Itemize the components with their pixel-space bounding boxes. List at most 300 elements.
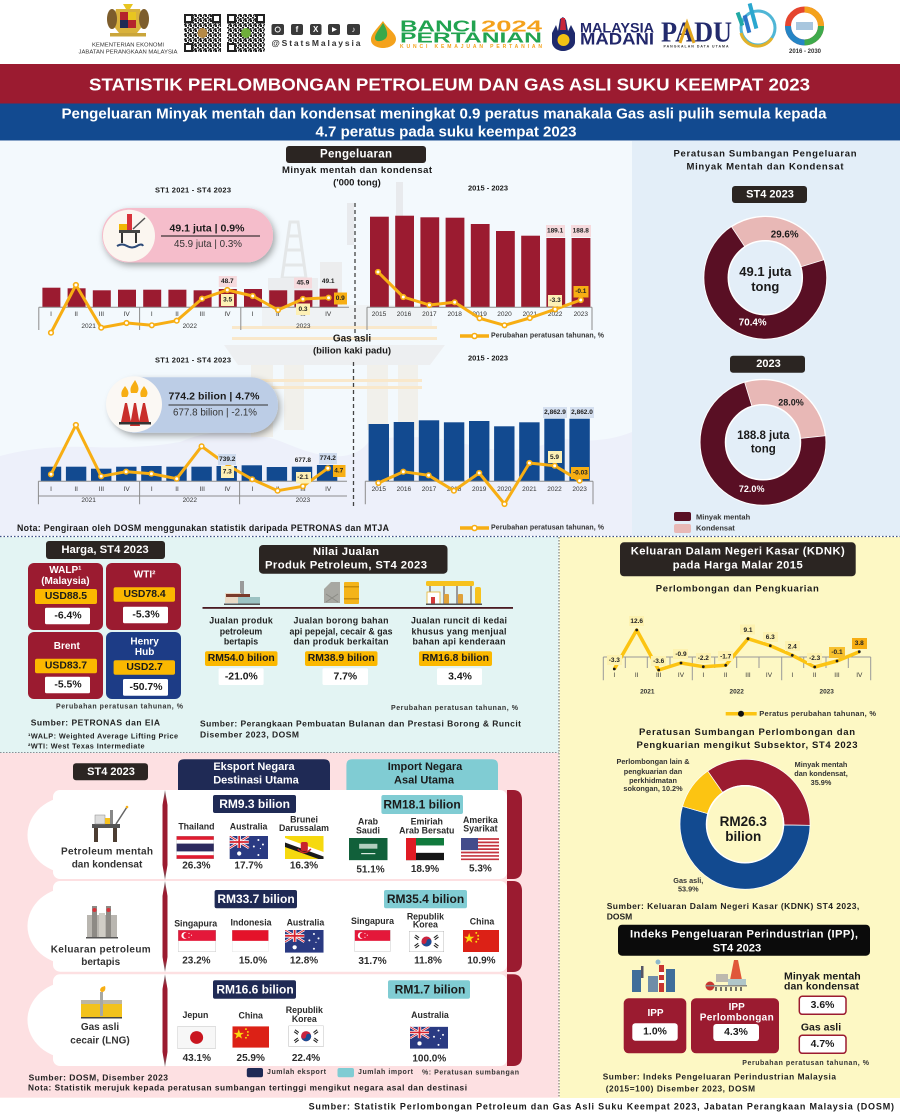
import country: China: China <box>470 917 494 927</box>
import country: China: 10.9% <box>467 956 496 966</box>
ministry name: JABATAN PERANGKAAN MALAYSIA <box>78 49 178 55</box>
line chart: GDP mining growth: III <box>745 672 751 679</box>
bar chart: gas quarterly <box>38 465 347 504</box>
export country: Brunei: Darussalam <box>279 823 329 833</box>
bar chart: gas annual: 2018 <box>447 486 462 493</box>
line chart: GDP mining growth: I <box>791 672 793 679</box>
heading: subsector share <box>636 727 858 751</box>
legend: donut: Kondensat <box>696 524 735 532</box>
icon: oil platform <box>92 806 128 842</box>
bar chart: gas quarterly: III <box>199 486 205 493</box>
line chart: GDP mining growth: I <box>613 672 615 679</box>
card: WALP: -6.4% <box>54 610 82 622</box>
donut chart: 2023 <box>700 379 826 506</box>
heading: natural gas <box>313 334 391 356</box>
sales column: retail fuel: khusus yang menjual <box>412 626 506 636</box>
logo: SDG wheel <box>788 10 822 55</box>
note: sales change unit: Perubahan peratusan tahunan, % <box>391 705 519 712</box>
source: sales: Disember 2023, DOSM <box>200 730 299 740</box>
logo: Banci Pertanian 2024 <box>371 18 542 50</box>
import country: USA <box>461 815 499 874</box>
line chart: gas quarterly change: -2.1 <box>297 474 309 481</box>
heading: crude oil and condensate: ('000 tong) <box>333 178 381 188</box>
bar chart: gas quarterly: 2023 <box>296 497 311 504</box>
icon: jerry can and drum <box>324 582 359 604</box>
heading: natural gas: Gas asli <box>333 334 371 344</box>
heading: subsector share: Peratusan Sumbangan Perlombongan dan <box>639 727 855 738</box>
legend: trade <box>247 1068 519 1077</box>
bar chart: gas annual: 2016 <box>397 486 412 493</box>
subtitle banner: 4.7 peratus pada suku keempat 2023 <box>316 124 576 140</box>
bar chart: gas annual: 2021 <box>522 486 537 493</box>
bar chart: crude quarterly: II <box>276 311 280 318</box>
legend: crude line: Perubahan peratusan tahunan, % <box>491 332 605 340</box>
pill: RM1.7 bilion import <box>388 980 470 999</box>
legend: donut <box>674 512 751 533</box>
bar chart: gas quarterly: III <box>99 486 104 493</box>
sales column: refined products: Jualan produk <box>209 616 273 626</box>
stat: crude oil IPP: 3.6% <box>811 1000 834 1011</box>
heading: Nilai Jualan: Nilai Jualan <box>313 546 379 558</box>
donut chart: subsector share <box>617 757 848 894</box>
import country: Saudi Arabia: Arab <box>358 817 379 827</box>
bar chart: gas annual: 2023 <box>572 486 587 493</box>
card: WALP: (Malaysia) <box>41 576 90 587</box>
period label annual crude: 2015 - 2023 <box>468 184 508 192</box>
panel: production charts <box>0 141 632 536</box>
heading: Harga <box>46 541 165 559</box>
import country: Australia <box>410 1010 449 1064</box>
bar chart: crude quarterly: IV <box>124 311 130 318</box>
icon: gas flare rigs <box>106 376 162 432</box>
callout: crude value bubble <box>102 208 273 262</box>
bar chart: crude annual: 2017 <box>422 311 437 318</box>
bar chart: gas quarterly: 2022 <box>183 497 197 504</box>
row: LNG: Gas asli <box>81 1022 119 1033</box>
heading: Pengeluaran: Pengeluaran <box>320 148 392 160</box>
line chart: gas annual change <box>376 451 589 506</box>
social media icons and handle: f <box>296 25 299 34</box>
card: Henry Hub <box>106 632 181 699</box>
logo: Banci Pertanian 2024: KUNCI KEMAJUAN PERTANIAN <box>400 44 542 50</box>
line chart: gas quarterly change <box>49 423 345 493</box>
donut chart: 2023: 28.0% <box>778 397 804 407</box>
line chart: crude annual change: -0.1 <box>575 288 587 295</box>
source: GDP: DOSM <box>607 912 632 922</box>
export country: Indonesia: 15.0% <box>239 956 267 966</box>
export country: South Korea: 22.4% <box>292 1053 320 1064</box>
card: IPP Perlombongan: 4.3% <box>724 1027 748 1038</box>
heading: import: Asal Utama <box>394 775 455 787</box>
donut chart: subsector share: perkhidmatan <box>629 776 677 785</box>
row: LNG <box>28 974 522 1067</box>
icon: offshore oil rig <box>103 210 155 262</box>
source: IPP: Sumber: Indeks Pengeluaran Perindustrian Malaysia <box>603 1072 836 1082</box>
bar chart: crude annual: 2018 <box>447 311 462 318</box>
source and note: trade <box>28 1072 467 1093</box>
bar chart: crude quarterly: IV <box>325 311 332 318</box>
bar chart: crude quarterly: III <box>199 311 205 318</box>
sales column: wholesale fuels: api pepejal, cecair & gas <box>290 626 393 636</box>
import country: South Korea: 11.8% <box>414 956 442 966</box>
stat: crude oil IPP: Minyak mentah <box>784 970 861 982</box>
donut chart: ST4 2023: 70.4% <box>739 318 767 328</box>
export country: Thailand: Thailand <box>178 822 214 832</box>
export country: Australia: Australia <box>287 918 324 928</box>
line chart: GDP mining growth: -1.7 <box>720 654 732 660</box>
pill: ST4 2023: ST4 2023 <box>87 766 135 778</box>
import country: South Korea <box>407 911 444 966</box>
legend: trade: %: Peratusan sumbangan <box>422 1070 519 1076</box>
heading: subsector share: Pengkuarian mengikut Subsektor, ST4 2023 <box>636 740 858 751</box>
line chart: GDP mining growth: -0.9 <box>675 651 687 658</box>
card: Brent: -5.5% <box>54 680 82 690</box>
bar chart: gas quarterly: 2021 <box>81 497 96 504</box>
card: WTI: -5.3% <box>132 610 160 620</box>
sales column: refined products: -21.0% <box>225 672 258 682</box>
social media icons and handle: X <box>313 25 319 34</box>
bar chart: gas annual <box>365 407 594 504</box>
export country: Singapore <box>174 918 217 966</box>
import country: South Korea: Republik <box>407 911 444 921</box>
card: WTI <box>106 563 181 630</box>
card: Henry Hub: USD2.7 <box>126 662 163 673</box>
export country: Indonesia <box>230 918 272 966</box>
line chart: GDP mining growth: 3.8 <box>855 640 864 647</box>
line chart: GDP mining growth: -3.6 <box>653 658 665 665</box>
heading: KDNK: pada Harga Malar 2015 <box>673 560 803 572</box>
line chart: GDP mining growth: IV <box>766 672 773 679</box>
bar chart: crude quarterly: 2023 <box>296 323 311 330</box>
icon: mining plant <box>706 960 747 991</box>
import country: Saudi Arabia <box>349 817 388 876</box>
bar chart: gas quarterly: II <box>276 486 280 493</box>
card: WTI: WTI² <box>134 570 156 580</box>
heading: natural gas: (bilion kaki padu) <box>313 346 391 356</box>
import country: China <box>463 917 499 966</box>
stat: gas IPP: Gas asli <box>801 1021 841 1033</box>
card: Henry Hub: -50.7% <box>130 682 162 693</box>
logo: Banci Pertanian 2024: BANCI <box>400 18 477 36</box>
line chart: GDP mining growth: 12.6 <box>630 618 643 625</box>
card: Henry Hub: Hub <box>135 647 154 658</box>
card: IPP Perlombongan: Perlombongan <box>700 1012 774 1024</box>
bar chart: crude annual: 2023 <box>574 311 588 318</box>
social media icons and handle <box>272 24 361 48</box>
panel: trade <box>0 753 558 1098</box>
bar chart: crude quarterly: II <box>175 311 179 318</box>
bar chart: crude annual: 189.1 <box>547 228 564 234</box>
sales column: wholesale fuels: Jualan borong bahan <box>294 616 388 626</box>
import country: UAE: Arab Bersatu <box>399 825 454 835</box>
sales column: refined products: bertapis <box>224 637 258 647</box>
sales column: retail fuel: Jualan runcit di kedai <box>411 616 507 626</box>
export country: Brunei: Brunei <box>290 814 318 824</box>
pill: RM18.1 bilion import <box>381 795 463 814</box>
note: price change unit: Perubahan peratusan tahunan, % <box>56 704 184 710</box>
import country: USA: Amerika <box>463 815 498 825</box>
callout: crude value bubble: 45.9 juta | 0.3% <box>174 239 242 250</box>
heading: export: Eksport Negara <box>213 761 296 773</box>
import country: UAE: 18.9% <box>411 864 439 875</box>
source: IPP: (2015=100) Disember 2023, DOSM <box>606 1083 755 1093</box>
bar chart: gas annual: 2022 <box>547 486 562 493</box>
sales column: retail fuel: 3.4% <box>448 672 472 682</box>
import country: Singapore: 31.7% <box>358 956 387 967</box>
sales column: retail fuel: RM16.8 bilion <box>422 653 489 664</box>
donut chart: subsector share: pengkuarian dan <box>624 767 682 776</box>
sales column: wholesale fuels <box>290 616 393 685</box>
bar chart: crude quarterly: I <box>50 311 52 318</box>
export country: China: 25.9% <box>237 1053 265 1064</box>
donut chart: subsector share: Perlombongan lain & <box>617 757 690 766</box>
legend: trade: Jumlah import <box>358 1069 414 1076</box>
source and note: trade: Nota: Statistik merujuk kepada peratusan sumbangan tertinggi mengikut negara asal dan destinasi <box>28 1083 467 1093</box>
bar chart: crude annual: 2016 <box>397 311 412 318</box>
heading: IPP <box>618 925 870 956</box>
period label annual gas: 2015 - 2023 <box>468 354 508 362</box>
pill: 2023 <box>730 356 805 373</box>
export country: South Korea <box>286 1005 324 1064</box>
note: IPP change unit: Perubahan peratusan tahunan, % <box>742 1060 870 1067</box>
card: IPP <box>624 998 686 1053</box>
pill: RM9.3 bilion export <box>213 795 296 813</box>
source: price: Sumber: PETRONAS dan EIA <box>31 718 160 728</box>
bar chart: gas annual: 2020 <box>497 486 512 493</box>
stat: gas IPP: 4.7% <box>811 1039 834 1050</box>
line chart: gas quarterly change: 677.8 <box>295 457 311 464</box>
legend: gas line: Perubahan peratusan tahunan, % <box>491 524 605 532</box>
pill: 2023: 2023 <box>756 358 781 370</box>
source: IPP <box>603 1072 836 1093</box>
export country: Thailand: 26.3% <box>182 860 211 872</box>
stat: gas IPP <box>799 1021 846 1053</box>
social media icons and handle: ♪ <box>352 25 356 34</box>
callout: gas value bubble <box>106 376 278 433</box>
legend: trade: Jumlah eksport <box>267 1069 327 1076</box>
row: refined petroleum: Keluaran petroleum <box>51 944 151 956</box>
export country: South Korea: Korea <box>292 1014 317 1024</box>
panel: GDP and IPI <box>560 537 900 1098</box>
bar chart: crude quarterly: 2021 <box>81 323 96 330</box>
line chart: GDP mining growth: -0.1 <box>831 649 843 656</box>
card: WALP <box>28 563 103 630</box>
pill: RM33.7 bilion export: RM33.7 bilion <box>217 892 295 906</box>
import country: Singapore: Singapura <box>351 916 394 926</box>
bar chart: gas annual: 2015 <box>372 486 386 493</box>
card: WALP: WALP¹ <box>49 565 82 576</box>
line chart: GDP mining growth: 9.1 <box>743 627 753 634</box>
export country: Indonesia: Indonesia <box>230 918 272 928</box>
card: IPP Perlombongan <box>691 998 779 1053</box>
divider between quarterly and annual <box>354 203 356 338</box>
logo: SDG wheel: 2016 - 2030 <box>789 49 822 55</box>
row: refined petroleum <box>28 881 522 972</box>
line chart: GDP mining growth: -2.2 <box>698 655 709 662</box>
bar chart: gas quarterly: I <box>252 486 254 493</box>
legend: donut: Minyak mentah <box>696 512 751 522</box>
bar chart: crude quarterly: II <box>74 311 78 318</box>
heading: export: Destinasi Utama <box>213 775 300 787</box>
heading: import: Import Negara <box>388 761 463 773</box>
row: LNG: cecair (LNG) <box>70 1036 130 1046</box>
icon: refinery towers <box>86 906 118 938</box>
sales column: refined products: RM54.0 bilion <box>208 653 275 664</box>
line chart: gas quarterly change: 7.3 <box>223 468 232 476</box>
export country: Australia: Australia <box>230 821 268 831</box>
line chart: gas quarterly change: 774.2 <box>320 455 336 462</box>
line chart: crude quarterly change <box>49 283 347 335</box>
card: Brent <box>28 632 103 699</box>
line chart: gas quarterly change: 739.2 <box>219 456 236 463</box>
source: price <box>28 718 178 750</box>
import country: USA: 5.3% <box>469 864 492 874</box>
title banner: STATISTIK PERLOMBONGAN PETROLEUM DAN GAS ASLI SUKU KEEMPAT 2023 <box>89 74 810 94</box>
background oil platform watermark <box>224 182 445 437</box>
heading: contribution share <box>674 148 857 172</box>
bar chart: crude quarterly: IV <box>224 311 231 318</box>
heading: export <box>178 759 330 791</box>
sales column: wholesale fuels: RM38.9 bilion <box>308 653 375 664</box>
pill: RM1.7 bilion import: RM1.7 bilion <box>395 982 465 996</box>
donut chart: subsector share: 53.9% <box>678 884 699 894</box>
source: sales <box>200 719 521 740</box>
bar chart: crude quarterly: 48.7 <box>221 278 234 285</box>
social media icons and handle: @StatsMalaysia <box>272 38 361 48</box>
donut chart: ST4 2023: tong <box>751 279 779 294</box>
title banner <box>0 64 900 104</box>
pill: RM9.3 bilion export: RM9.3 bilion <box>219 797 290 811</box>
pill: RM18.1 bilion import: RM18.1 bilion <box>383 798 461 812</box>
export country: Australia: 17.7% <box>234 860 263 872</box>
donut chart: subsector share: Gas asli, <box>673 876 703 885</box>
line chart: GDP mining growth: I <box>702 672 704 679</box>
logo: Malaysia Madani <box>552 17 654 51</box>
heading: crude oil and condensate: Minyak mentah dan kondensat <box>282 165 433 176</box>
panel: price and sales <box>0 537 558 753</box>
bar chart: gas quarterly: IV <box>124 486 130 493</box>
bar chart: crude quarterly: III <box>300 311 306 318</box>
stat: crude oil IPP: dan kondensat <box>784 980 860 992</box>
logo: Banci Pertanian 2024: PERTANIAN <box>400 30 542 46</box>
bar chart: crude quarterly: III <box>99 311 104 318</box>
bar chart: gas quarterly: IV <box>224 486 231 493</box>
sales column: retail fuel: bahan api kenderaan <box>412 637 506 647</box>
donut chart: ST4 2023 <box>703 216 827 340</box>
icon: LNG tanker <box>81 986 122 1018</box>
heading: IPP: ST4 2023 <box>713 942 761 954</box>
bar chart: gas annual: 2,862.0 <box>571 409 593 416</box>
card: WALP: USD88.5 <box>45 591 87 602</box>
card: Henry Hub: Henry <box>130 636 159 648</box>
ministry name <box>78 42 178 55</box>
icon: refinery factory <box>224 581 260 605</box>
line chart: GDP mining growth <box>603 616 871 696</box>
export country: Singapore: Singapura <box>174 918 217 928</box>
heading: mining and quarrying: Perlombongan dan Pengkuarian <box>656 584 819 594</box>
divider: sales <box>202 607 513 609</box>
callout: crude value bubble: 49.1 juta | 0.9% <box>170 222 245 234</box>
line chart: GDP mining growth: 2022 <box>729 688 744 696</box>
logo: PADU: PANGKALAN DATA UTAMA <box>664 44 729 48</box>
export country: Brunei <box>279 814 329 872</box>
sales column: refined products: petroleum <box>220 626 262 636</box>
bar chart: crude annual: 2019 <box>472 311 487 318</box>
heading: KDNK: Keluaran Dalam Negeri Kasar (KDNK) <box>631 546 845 558</box>
import country: UAE: Emiriah <box>411 817 443 827</box>
sales column: refined products <box>205 616 278 685</box>
line chart: crude annual change <box>376 270 588 328</box>
bar chart: crude annual: 188.8 <box>573 228 589 234</box>
divider between gas charts <box>352 362 354 506</box>
heading: Harga: Harga, ST4 2023 <box>61 544 149 556</box>
bar chart: gas quarterly: I <box>151 486 153 493</box>
pill: ST4 2023 <box>73 763 148 780</box>
callout: gas value bubble: 677.8 bilion | -2.1% <box>173 408 257 418</box>
heading: import <box>346 759 498 791</box>
period label quarterly gas: ST1 2021 - ST4 2023 <box>155 356 231 364</box>
import country: USA: Syarikat <box>463 824 498 834</box>
line chart: crude quarterly change: 3.5 <box>223 296 232 304</box>
line chart: gas quarterly change: 4.7 <box>334 468 344 474</box>
export country: Australia <box>230 821 268 872</box>
line chart: GDP mining growth: -3.3 <box>609 657 620 664</box>
card: IPP Perlombongan: IPP <box>729 1002 745 1013</box>
row: refined petroleum: bertapis <box>81 957 121 968</box>
stat: crude oil IPP <box>784 970 861 1014</box>
donut chart: 2023: 72.0% <box>739 484 764 494</box>
legend: GDP line: Peratus perubahan tahunan, % <box>759 709 876 718</box>
card: IPP: IPP <box>647 1008 664 1019</box>
source: price: ¹WALP: Weighted Average Lifting Price <box>28 732 178 740</box>
bar chart: gas annual: 2017 <box>422 486 437 493</box>
callout: gas value bubble: 774.2 bilion | 4.7% <box>168 390 260 402</box>
sales column: wholesale fuels: dan produk berkaitan <box>294 637 388 647</box>
bar chart: gas quarterly: IV <box>325 486 332 493</box>
export country: Australia: 12.8% <box>290 956 318 966</box>
export country: Japan: 43.1% <box>183 1053 211 1064</box>
bar chart: gas quarterly: II <box>175 486 179 493</box>
row: crude petroleum and condensate: dan kondensat <box>72 860 143 870</box>
bar chart: crude quarterly: 49.1 <box>322 278 335 285</box>
header logos strip <box>78 3 822 55</box>
heading: Nilai Jualan: Produk Petroleum, ST4 2023 <box>265 560 427 572</box>
panel: crude oil and condensate share donuts <box>632 141 900 536</box>
donut chart: ST4 2023: 49.1 juta <box>739 264 792 279</box>
icon: factory <box>632 960 675 992</box>
donut chart: subsector share: Minyak mentah <box>795 760 847 769</box>
line chart: GDP mining growth: III <box>834 672 840 679</box>
pill: ST4 2023: ST4 2023 <box>746 188 794 200</box>
sales column: retail fuel <box>411 616 507 685</box>
bar chart: crude quarterly: I <box>252 311 254 318</box>
import country: Australia: Australia <box>411 1010 449 1020</box>
ministry name: KEMENTERIAN EKONOMI <box>92 42 164 48</box>
export country: Singapore: 23.2% <box>182 956 211 966</box>
source: GDP: Sumber: Keluaran Dalam Negeri Kasar (KDNK) ST4 2023, <box>607 901 859 911</box>
bar chart: gas annual: 2019 <box>472 486 487 493</box>
card: Brent: USD83.7 <box>45 660 87 672</box>
export country: Brunei: 16.3% <box>290 860 318 872</box>
donut chart: subsector share: RM26.3 <box>720 814 767 829</box>
line chart: GDP mining growth: -2.3 <box>809 655 821 662</box>
line chart: gas annual change: 5.9 <box>550 454 559 461</box>
line chart: GDP mining growth: IV <box>856 672 863 679</box>
import country: UAE <box>399 817 454 875</box>
donut chart: subsector share: sokongan, 10.2% <box>623 784 683 793</box>
QR codes <box>184 14 265 52</box>
donut chart: 2023: tong <box>751 443 776 455</box>
